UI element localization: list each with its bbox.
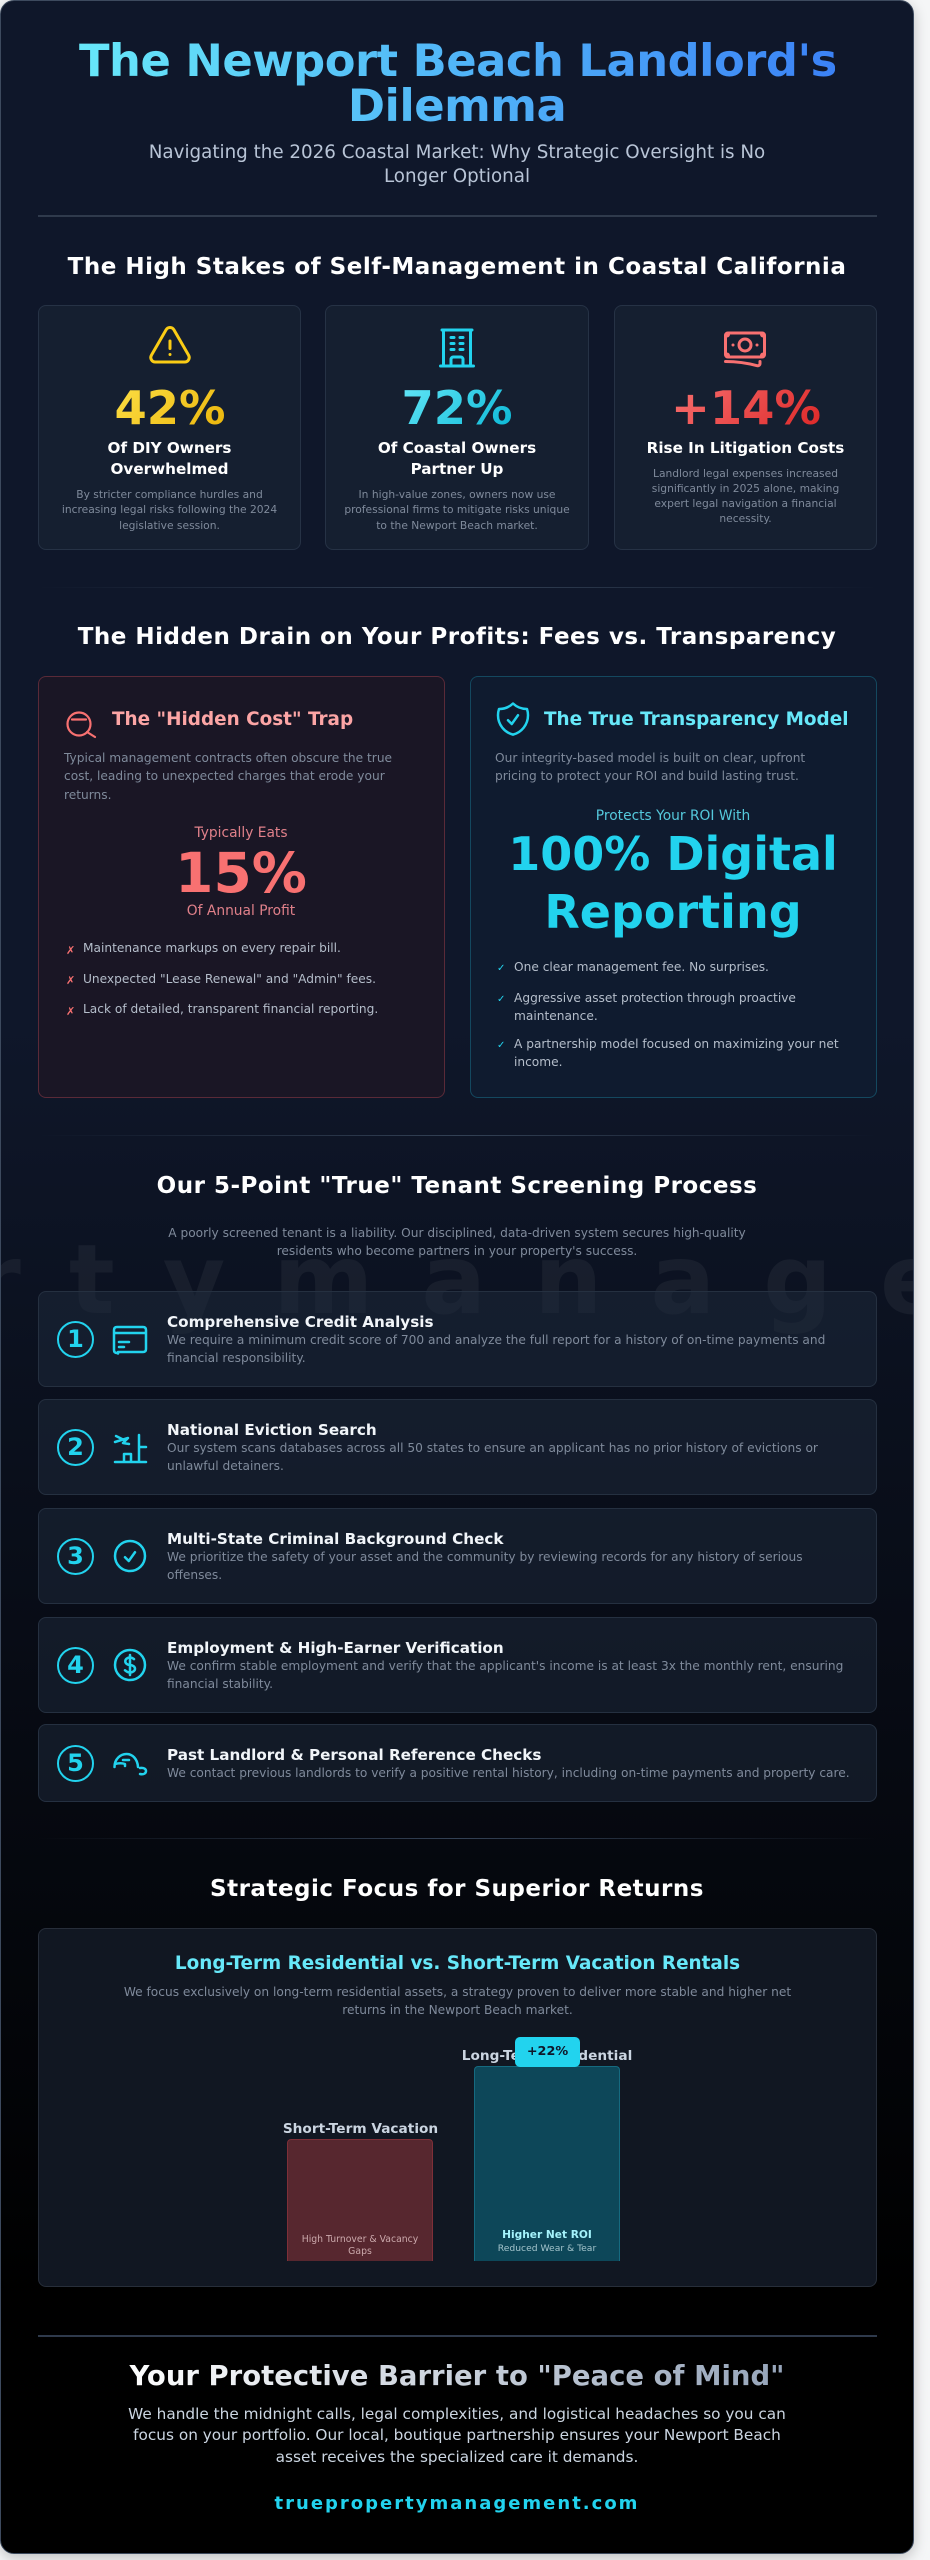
step title: Comprehensive Credit Analysis bbox=[167, 1313, 434, 1331]
panel intro: returns in the Newport Beach market. bbox=[342, 2003, 573, 2017]
step description: Our system scans databases across all 50 states to ensure an applicant has no prior history of evictions or bbox=[167, 1441, 818, 1455]
heading: high stakes: The High Stakes of Self-Management in Coastal California bbox=[68, 254, 846, 280]
list: transparency items: A partnership model focused on maximizing your net bbox=[514, 1036, 839, 1050]
icon: hand arcs bbox=[113, 1752, 148, 1776]
stat description bbox=[652, 466, 839, 525]
roi badge: +22% bbox=[527, 2044, 568, 2059]
stat card: 72% bbox=[325, 305, 589, 550]
stat label: Of DIY Owners bbox=[108, 439, 231, 457]
bar label: Long-Term Residential bbox=[462, 2048, 632, 2064]
list: hidden cost items bbox=[66, 941, 378, 1018]
callout number: 100% Digital bbox=[508, 827, 838, 881]
stat description: expert legal navigation a financial bbox=[654, 497, 837, 510]
caption detail: Reduced Wear & Tear bbox=[498, 2243, 596, 2254]
panel intro: Our integrity-based model is built on clear, upfront bbox=[495, 751, 805, 765]
step number: 2 bbox=[67, 1433, 84, 1461]
footer text: asset receives the specialized care it demands. bbox=[276, 2448, 638, 2466]
stat description: Landlord legal expenses increased bbox=[653, 466, 838, 480]
callout: digital reporting bbox=[508, 808, 838, 938]
stat description: increasing legal risks following the 2024 bbox=[62, 503, 277, 516]
heading: hidden drain: The Hidden Drain on Your Profits: Fees vs. Transparency bbox=[78, 624, 836, 650]
stat label: Rise In Litigation Costs bbox=[647, 439, 844, 457]
icon: credit card bbox=[112, 1326, 148, 1355]
screening intro: residents who become partners in your property's success. bbox=[277, 1244, 637, 1258]
bar: short-term vacation bbox=[283, 2121, 438, 2261]
icon: dollar circle bbox=[114, 1648, 146, 1682]
stat number: 72% bbox=[401, 381, 513, 435]
panel: true transparency model bbox=[470, 676, 877, 1098]
panel intro: We focus exclusively on long-term residential assets, a strategy proven to deliver more stable and higher net bbox=[124, 1985, 791, 1999]
callout caption: Of Annual Profit bbox=[187, 902, 295, 918]
subtitle bbox=[149, 142, 765, 187]
panel: hidden cost trap bbox=[38, 676, 445, 1098]
step number bbox=[57, 1745, 94, 1782]
step 4: employment verification bbox=[38, 1617, 877, 1713]
step number: 1 bbox=[67, 1325, 84, 1353]
callout: 15% of annual profit bbox=[175, 825, 307, 918]
step description: financial responsibility. bbox=[167, 1351, 306, 1365]
list: hidden cost items: ✗ bbox=[66, 1005, 75, 1018]
step number bbox=[57, 1321, 94, 1358]
bar: long-term residential bbox=[462, 2037, 632, 2261]
title: The Newport Beach Landlord's bbox=[79, 34, 837, 87]
panel intro: Typical management contracts often obscure the true bbox=[64, 751, 392, 765]
callout number: Reporting bbox=[544, 884, 802, 938]
panel intro bbox=[64, 751, 392, 802]
step 3: criminal background bbox=[38, 1508, 877, 1604]
bar body bbox=[287, 2139, 433, 2261]
icon: warning triangle bbox=[149, 326, 191, 364]
panel heading: The True Transparency Model bbox=[544, 709, 848, 730]
step title: Past Landlord & Personal Reference Checks bbox=[167, 1746, 541, 1764]
footer text: focus on your portfolio. Our local, boutique partnership ensures your Newport Beach bbox=[133, 2426, 781, 2444]
stat label bbox=[378, 439, 536, 478]
list: transparency items: One clear management fee. No surprises. bbox=[514, 960, 769, 974]
roi badge bbox=[515, 2037, 580, 2067]
panel intro bbox=[495, 751, 805, 783]
panel heading: Long-Term Residential vs. Short-Term Vacation Rentals bbox=[175, 1953, 740, 1974]
stat description: professional firms to mitigate risks unique bbox=[344, 503, 570, 516]
panel heading: The "Hidden Cost" Trap bbox=[112, 709, 353, 730]
list: hidden cost items: ✗ bbox=[66, 944, 75, 957]
stat number: 42% bbox=[114, 381, 226, 435]
stat card: +14% bbox=[614, 305, 877, 550]
stat label: Partner Up bbox=[411, 460, 503, 478]
stat number: +14% bbox=[671, 381, 821, 435]
callout number bbox=[508, 827, 838, 938]
stat label bbox=[108, 439, 231, 478]
callout label: Typically Eats bbox=[194, 825, 288, 841]
panel intro bbox=[124, 1985, 791, 2017]
list: hidden cost items: ✗ bbox=[66, 974, 75, 987]
step number: 3 bbox=[67, 1542, 84, 1570]
list: transparency items: maintenance. bbox=[514, 1009, 598, 1023]
step description: We require a minimum credit score of 700 and analyze the full report for a history of on-time payments and bbox=[167, 1333, 825, 1347]
website link: truepropertymanagement.com bbox=[275, 2493, 639, 2514]
stat description: By stricter compliance hurdles and bbox=[76, 488, 263, 501]
panel intro: cost, leading to unexpected charges that erode your bbox=[64, 769, 385, 783]
stat description: significantly in 2025 alone, making bbox=[652, 482, 839, 495]
step description bbox=[167, 1550, 803, 1582]
stat label: Of Coastal Owners bbox=[378, 439, 536, 457]
step number bbox=[57, 1647, 94, 1684]
bar caption: Gaps bbox=[348, 2246, 372, 2257]
step description bbox=[167, 1659, 843, 1691]
footer text bbox=[128, 2405, 786, 2466]
step number: 4 bbox=[67, 1651, 84, 1679]
stat label: Overwhelmed bbox=[111, 460, 228, 478]
bar caption: High Turnover & Vacancy bbox=[302, 2234, 418, 2245]
step number bbox=[57, 1429, 94, 1466]
step title: Employment & High-Earner Verification bbox=[167, 1639, 504, 1657]
icon: banknotes bbox=[724, 332, 766, 368]
subtitle: Longer Optional bbox=[384, 166, 530, 187]
heading: screening process: Our 5-Point "True" Tenant Screening Process bbox=[157, 1173, 757, 1199]
step description bbox=[167, 1441, 818, 1473]
callout number: 15% bbox=[175, 841, 307, 905]
title: Dilemma bbox=[348, 79, 566, 132]
icon: magnifier bbox=[66, 711, 96, 738]
step 1: credit analysis bbox=[38, 1291, 877, 1387]
stat description bbox=[62, 488, 277, 532]
bar caption bbox=[498, 2229, 596, 2254]
step title: Multi-State Criminal Background Check bbox=[167, 1530, 504, 1548]
panel intro: returns. bbox=[64, 788, 112, 802]
stat card: 42% bbox=[38, 305, 301, 550]
step description: We contact previous landlords to verify a positive rental history, including on-time payments and property care. bbox=[167, 1766, 850, 1780]
screening intro bbox=[168, 1226, 746, 1258]
step description: offenses. bbox=[167, 1568, 222, 1582]
panel: long-term vs short-term bbox=[38, 1928, 877, 2287]
stat description: to the Newport Beach market. bbox=[376, 519, 538, 532]
step 5: reference checks bbox=[38, 1724, 877, 1802]
icon: plane and tower bbox=[114, 1434, 148, 1464]
footer text: We handle the midnight calls, legal complexities, and logistical headaches so you can bbox=[128, 2405, 786, 2423]
step number: 5 bbox=[67, 1749, 84, 1777]
icon: shield check bbox=[496, 702, 530, 736]
list: transparency items: ✓ bbox=[497, 994, 505, 1005]
list: transparency items: Aggressive asset protection through proactive bbox=[514, 990, 796, 1004]
list: hidden cost items: Lack of detailed, transparent financial reporting. bbox=[83, 1002, 378, 1016]
subtitle: Navigating the 2026 Coastal Market: Why Strategic Oversight is No bbox=[149, 142, 765, 163]
title bbox=[79, 38, 835, 128]
icon: building bbox=[439, 328, 475, 368]
step number bbox=[57, 1538, 94, 1575]
screening intro: A poorly screened tenant is a liability. Our disciplined, data-driven system secures high-quality bbox=[168, 1226, 746, 1240]
bar caption bbox=[302, 2234, 418, 2257]
callout label: Protects Your ROI With bbox=[596, 808, 750, 824]
caption strong: Higher Net ROI bbox=[502, 2229, 592, 2241]
list: transparency items: income. bbox=[514, 1055, 563, 1069]
footer heading: Your Protective Barrier to "Peace of Mind" bbox=[130, 2360, 784, 2392]
list: transparency items bbox=[497, 960, 839, 1069]
stat description bbox=[344, 488, 570, 532]
stat description: legislative session. bbox=[119, 519, 220, 532]
stat description: necessity. bbox=[719, 512, 772, 525]
step description: unlawful detainers. bbox=[167, 1459, 284, 1473]
step description bbox=[167, 1333, 825, 1365]
bar label: Short-Term Vacation bbox=[283, 2121, 438, 2137]
heading: strategic focus: Strategic Focus for Superior Returns bbox=[210, 1876, 704, 1902]
step 2: eviction search bbox=[38, 1399, 877, 1495]
bar body bbox=[474, 2066, 620, 2261]
icon: check circle bbox=[114, 1540, 146, 1572]
list: transparency items: ✓ bbox=[497, 963, 505, 974]
list: hidden cost items: Maintenance markups on every repair bill. bbox=[83, 941, 341, 955]
step description: We prioritize the safety of your asset and the community by reviewing records for any history of serious bbox=[167, 1550, 803, 1564]
step description: We confirm stable employment and verify that the applicant's income is at least 3x the monthly rent, ensuring bbox=[167, 1659, 843, 1673]
panel intro: pricing to protect your ROI and build lasting trust. bbox=[495, 769, 799, 783]
step title: National Eviction Search bbox=[167, 1421, 377, 1439]
list: hidden cost items: Unexpected "Lease Renewal" and "Admin" fees. bbox=[83, 972, 376, 986]
list: transparency items: ✓ bbox=[497, 1040, 505, 1051]
stat description: In high-value zones, owners now use bbox=[358, 488, 556, 501]
step description: financial stability. bbox=[167, 1677, 273, 1691]
